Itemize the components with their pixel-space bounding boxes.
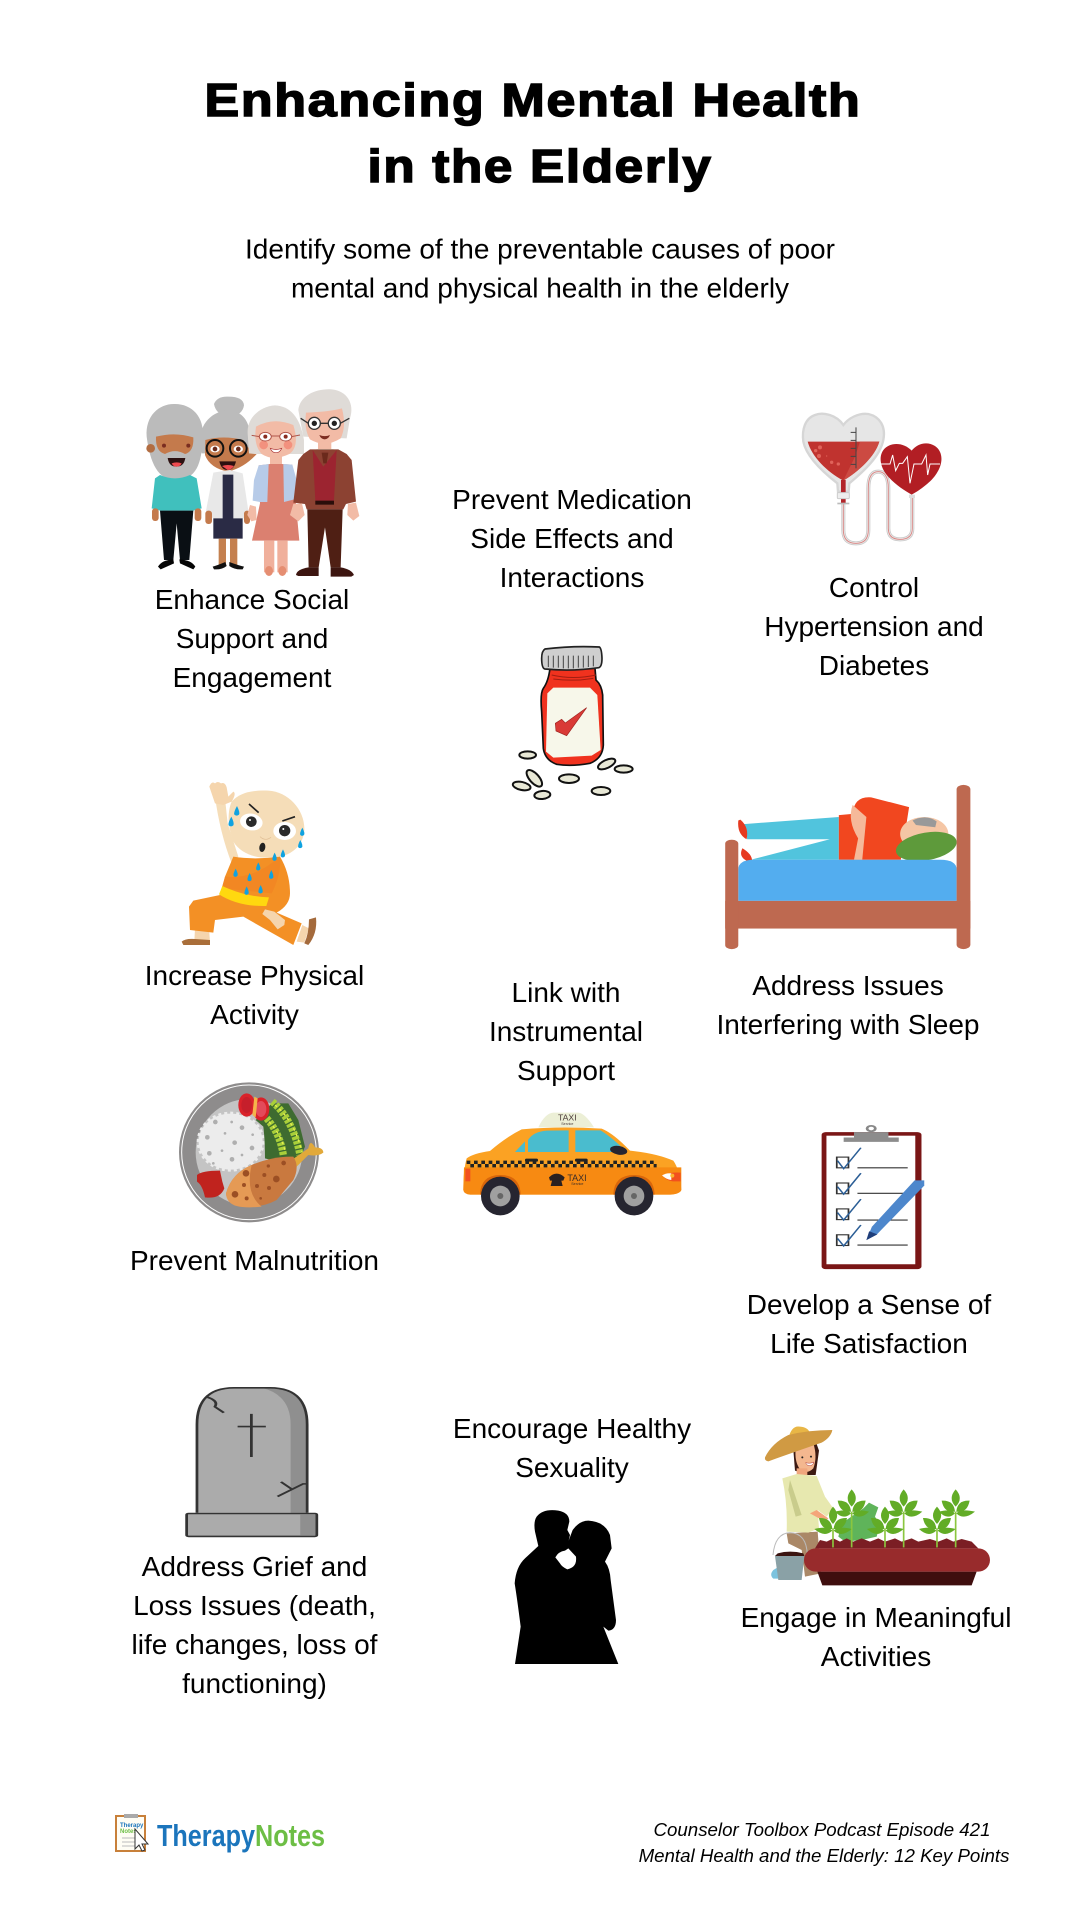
label xyxy=(145,960,364,1030)
label: Engage in Meaningful xyxy=(741,1602,1011,1633)
panel: healthy sexuality xyxy=(453,1413,691,1664)
label: Prevent Medication xyxy=(452,484,692,515)
panel: grief and loss xyxy=(132,1388,378,1699)
label xyxy=(764,572,984,681)
panel: sleep xyxy=(716,785,980,1040)
label: Support xyxy=(517,1055,615,1086)
subtitle: Identify some of the preventable causes of poor xyxy=(245,234,835,264)
label: Support and xyxy=(176,623,328,654)
panel: hypertension xyxy=(764,414,984,681)
label: Address Issues xyxy=(752,970,944,1001)
icon: clipboard logo xyxy=(116,1814,148,1851)
icon: couple silhouette xyxy=(515,1510,618,1664)
icon: exercising monk xyxy=(182,782,316,945)
icon: pill bottle xyxy=(512,647,633,800)
label xyxy=(452,484,692,593)
label: Loss Issues (death, xyxy=(133,1590,376,1621)
label: Develop a Sense of xyxy=(747,1289,991,1320)
label: Interactions xyxy=(500,562,644,593)
panel: medication xyxy=(452,484,692,800)
label: Increase Physical xyxy=(145,960,364,991)
panel: meaningful activities xyxy=(741,1426,1011,1672)
label xyxy=(741,1602,1011,1672)
label: Prevent Malnutrition xyxy=(130,1245,379,1276)
label: Engagement xyxy=(173,662,332,693)
label: Diabetes xyxy=(819,650,929,681)
panel: instrumental support xyxy=(463,977,681,1215)
icon: elderly group xyxy=(146,389,359,577)
label xyxy=(747,1289,991,1359)
icon: taxi: TAXI xyxy=(558,1113,577,1123)
title: Enhancing Mental Health xyxy=(204,74,862,126)
label: Activity xyxy=(210,999,299,1030)
label: Activities xyxy=(821,1641,931,1672)
label xyxy=(716,970,980,1040)
footer credit: Mental Health and the Elderly: 12 Key Points xyxy=(639,1845,1009,1866)
icon: taxi: Service xyxy=(561,1122,573,1126)
label: Life Satisfaction xyxy=(770,1328,968,1359)
icon: person in bed xyxy=(725,785,970,949)
panel: malnutrition xyxy=(130,1082,379,1276)
label: Instrumental xyxy=(489,1016,643,1047)
icon: plate of food xyxy=(179,1082,323,1222)
label: Encourage Healthy xyxy=(453,1413,691,1444)
label: Control xyxy=(829,572,919,603)
label: Address Grief and xyxy=(142,1551,367,1582)
label: Link with xyxy=(512,977,620,1008)
icon: heart blood bag xyxy=(803,414,941,543)
icon: taxi: Service xyxy=(571,1182,583,1186)
label xyxy=(132,1551,378,1699)
label: functioning) xyxy=(182,1668,327,1699)
title xyxy=(204,74,862,192)
subtitle: mental and physical health in the elderly xyxy=(291,272,789,304)
footer credit xyxy=(639,1819,1009,1866)
label xyxy=(453,1413,691,1483)
logo: TherapyNotes xyxy=(116,1814,325,1853)
subtitle xyxy=(245,234,835,304)
label: life changes, loss of xyxy=(132,1629,378,1660)
label: Enhance Social xyxy=(155,584,349,615)
label: Hypertension and xyxy=(764,611,984,642)
title: in the Elderly xyxy=(368,140,712,192)
icon: clipboard checklist xyxy=(822,1126,924,1269)
footer credit: Counselor Toolbox Podcast Episode 421 xyxy=(654,1819,990,1840)
icon: clipboard logo: Notes xyxy=(120,1829,137,1835)
label: Interfering with Sleep xyxy=(716,1009,980,1040)
label: Side Effects and xyxy=(470,523,674,554)
panel: social support xyxy=(146,389,359,693)
label: Sexuality xyxy=(515,1452,629,1483)
label xyxy=(489,977,643,1086)
panel: physical activity xyxy=(145,782,364,1030)
icon: clipboard logo: Therapy xyxy=(120,1823,144,1829)
icon: taxi xyxy=(463,1113,681,1215)
label xyxy=(155,584,349,693)
icon: tombstone xyxy=(187,1388,317,1536)
wordmark: TherapyNotes xyxy=(157,1818,325,1853)
icon: taxi: TAXI xyxy=(567,1173,587,1183)
panel: life satisfaction xyxy=(747,1126,991,1359)
icon: gardener with planter xyxy=(765,1426,990,1585)
